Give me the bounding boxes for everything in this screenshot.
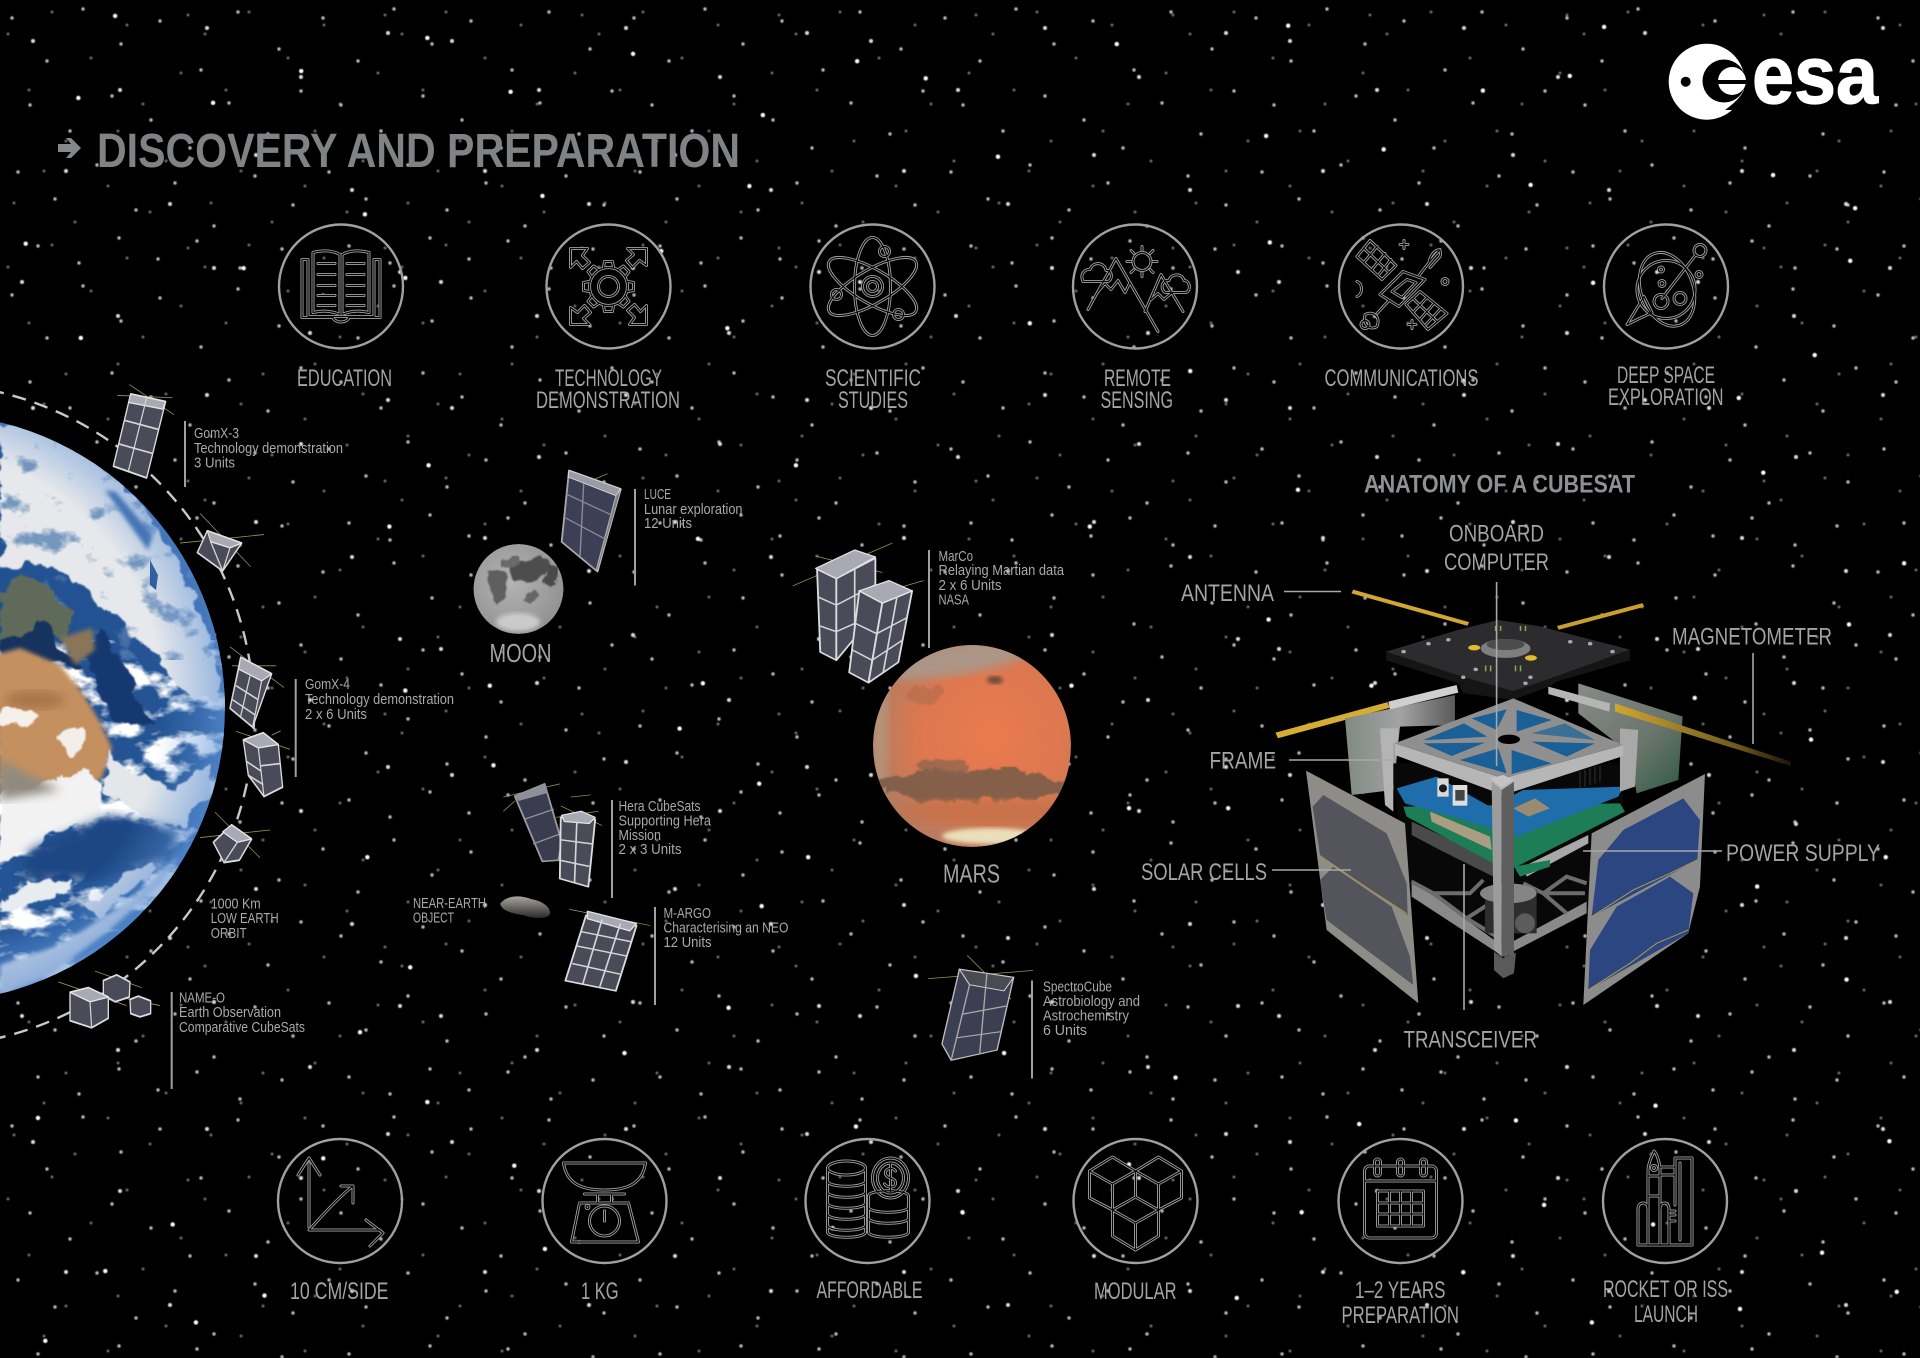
callout: LUCE: LUCE xyxy=(644,486,671,503)
label: communications: COMMUNICATIONS xyxy=(1324,365,1478,392)
antennas and onboard computer xyxy=(1277,592,1643,735)
callout: magnetometer: MAGNETOMETER xyxy=(1672,624,1832,650)
callout: low earth orbit: ORBIT xyxy=(211,925,247,942)
label: mars: MARS xyxy=(943,858,1000,888)
cubesat callouts xyxy=(1141,521,1880,1054)
satellite: LUCE xyxy=(562,470,621,572)
callout: LUCE: Lunar exploration xyxy=(644,501,742,518)
interior and bottom frame xyxy=(1390,763,1623,957)
callout: near-earth object xyxy=(413,895,486,926)
callout: solar cells: SOLAR CELLS xyxy=(1141,859,1267,886)
outer satellites xyxy=(500,470,1033,1060)
label: preparation time xyxy=(1342,1277,1459,1329)
callout: MarCo: 2 x 6 Units xyxy=(938,577,1002,594)
icon: preparation time xyxy=(1338,1139,1462,1263)
icon: remote sensing xyxy=(1073,224,1197,348)
orbit: 1000 km low earth orbit xyxy=(0,383,254,1047)
icon: launch xyxy=(1603,1139,1727,1263)
label: technology demonstration: DEMONSTRATION xyxy=(536,387,680,414)
callout: SpectroCube: 6 Units xyxy=(1043,1022,1087,1039)
label: launch: ROCKET OR ISS xyxy=(1603,1276,1728,1303)
callout: GomX-4: 2 x 6 Units xyxy=(305,706,367,723)
callout: M-ARGO: Characterising an NEO xyxy=(664,920,788,936)
label: scientific studies: STUDIES xyxy=(838,387,908,414)
callout: GomX-3: GomX-3 xyxy=(194,425,239,442)
callout: NAME-0: Comparative CubeSats xyxy=(179,1019,305,1036)
callout: frame: FRAME xyxy=(1210,748,1276,774)
icon: deep space exploration xyxy=(1604,224,1728,348)
label: preparation time: 1–2 YEARS xyxy=(1355,1277,1446,1304)
callout: GomX-3 xyxy=(185,421,343,487)
label: education: EDUCATION xyxy=(297,365,392,392)
callout: GomX-4 xyxy=(296,676,454,777)
callout: M-ARGO: M-ARGO xyxy=(664,905,711,922)
icon: scientific studies xyxy=(810,224,934,348)
label: remote sensing: SENSING xyxy=(1100,387,1173,414)
callout: onboard computer: ONBOARD xyxy=(1449,521,1544,548)
callout: Hera CubeSats: Mission xyxy=(618,827,661,844)
label: launch xyxy=(1603,1276,1728,1328)
callout: LUCE xyxy=(635,486,742,586)
circuit boards xyxy=(1397,766,1625,877)
satellite: 1U xyxy=(180,513,264,571)
callout: NAME-0: NAME-O xyxy=(179,990,225,1006)
solar panel left xyxy=(1306,771,1418,1003)
satellite: GomX-4 upper xyxy=(230,647,284,727)
label: moon: MOON xyxy=(490,638,552,668)
label: technology demonstration xyxy=(536,365,680,414)
callout: MarCo xyxy=(929,548,1065,648)
callout: near-earth object: OBJECT xyxy=(413,910,454,926)
satellites: NAME-0 xyxy=(58,971,160,1028)
icon: modular xyxy=(1074,1139,1198,1263)
callout: SpectroCube xyxy=(1032,978,1140,1078)
callout: GomX-4: GomX-4 xyxy=(305,676,350,693)
icon: affordable xyxy=(806,1139,930,1263)
callout: GomX-3: Technology demonstration xyxy=(194,440,343,457)
callout: GomX-3: 3 Units xyxy=(194,454,235,472)
label: launch: LAUNCH xyxy=(1634,1301,1698,1328)
satellite: GomX-4 lower xyxy=(236,731,290,797)
label: preparation time: PREPARATION xyxy=(1342,1302,1459,1329)
callout: NAME-0 xyxy=(172,990,305,1089)
callout: Hera CubeSats: 2 x 3 Units xyxy=(618,841,682,858)
icon row: characteristics xyxy=(278,1139,1728,1329)
planet: moon xyxy=(474,544,564,634)
label: technology demonstration: TECHNOLOGY xyxy=(555,365,662,392)
satellite: 1U lower xyxy=(200,812,270,863)
callout: MarCo: MarCo xyxy=(938,548,973,565)
label: scientific studies xyxy=(825,365,921,414)
label: remote sensing: REMOTE xyxy=(1104,365,1171,392)
planet: mars xyxy=(870,633,1071,847)
label: deep space exploration xyxy=(1608,362,1724,411)
satellite: M-ARGO xyxy=(565,909,650,991)
icon: 1 kg xyxy=(542,1139,666,1263)
frame xyxy=(1380,698,1638,978)
planet: earth xyxy=(0,414,230,1002)
callout: MarCo: NASA xyxy=(938,592,969,608)
callout: near-earth object: NEAR-EARTH xyxy=(413,895,486,912)
cube body xyxy=(1306,683,1791,1005)
label: affordable: AFFORDABLE xyxy=(816,1277,922,1304)
callout: low earth orbit xyxy=(211,896,279,942)
cubesat: exploded view xyxy=(1277,592,1791,1005)
title: DISCOVERY AND PREPARATION xyxy=(97,125,740,178)
callout: SpectroCube: SpectroCube xyxy=(1043,978,1112,996)
callout: Hera CubeSats xyxy=(612,798,712,898)
callout: low earth orbit: 1000 Km xyxy=(211,896,261,912)
callout: NAME-0: Earth Observation xyxy=(179,1004,281,1021)
callout: LUCE: 12 Units xyxy=(644,515,692,532)
label: deep space exploration: EXPLORATION xyxy=(1608,384,1724,411)
near-earth satellites xyxy=(58,385,290,1028)
satellite: Hera pair xyxy=(503,784,602,887)
heading: anatomy of a cubesat: ANATOMY OF A CUBESAT xyxy=(1364,471,1635,499)
icon: education xyxy=(279,224,403,348)
label: remote sensing xyxy=(1100,365,1173,414)
callout: antenna: ANTENNA xyxy=(1181,580,1274,607)
callout: low earth orbit: LOW EARTH xyxy=(211,910,279,927)
callout: power supply: POWER SUPPLY xyxy=(1726,840,1880,867)
logo: esa: esa xyxy=(1752,30,1879,121)
callout: onboard computer xyxy=(1444,521,1549,766)
icon: 10 cm per side xyxy=(278,1139,402,1263)
icon: communications xyxy=(1339,224,1463,348)
callout: MarCo: Relaying Martian data xyxy=(938,562,1065,579)
icon row: applications xyxy=(279,224,1728,414)
solar panel right xyxy=(1583,774,1705,1005)
callout: M-ARGO xyxy=(655,905,788,1005)
label: scientific studies: SCIENTIFIC xyxy=(825,365,921,392)
satellite: SpectroCube xyxy=(928,955,1033,1060)
logo: esa xyxy=(1665,30,1885,124)
back panels xyxy=(1345,683,1791,795)
satellite: GomX-3 xyxy=(113,385,174,478)
label: modular: MODULAR xyxy=(1094,1278,1176,1305)
callout: SpectroCube: Astrobiology and xyxy=(1043,993,1140,1010)
callout: SpectroCube: Astrochemistry xyxy=(1043,1008,1129,1024)
callout: Hera CubeSats: Supporting Hera xyxy=(618,812,712,830)
callout: M-ARGO: 12 Units xyxy=(664,934,712,951)
mission labels xyxy=(172,421,1140,1089)
satellite: MarCo xyxy=(793,543,924,683)
icon: technology demonstration xyxy=(546,224,670,348)
label: 1 kg: 1 KG xyxy=(581,1278,618,1305)
callout: onboard computer: COMPUTER xyxy=(1444,549,1549,576)
near-earth object xyxy=(500,896,550,918)
label: 10 cm per side: 10 CM/SIDE xyxy=(290,1278,388,1305)
callout: Hera CubeSats: Hera CubeSats xyxy=(618,798,700,815)
callout: transceiver: TRANSCEIVER xyxy=(1404,1026,1537,1054)
label: deep space exploration: DEEP SPACE xyxy=(1617,362,1715,389)
callout: GomX-4: Technology demonstration xyxy=(305,691,454,708)
